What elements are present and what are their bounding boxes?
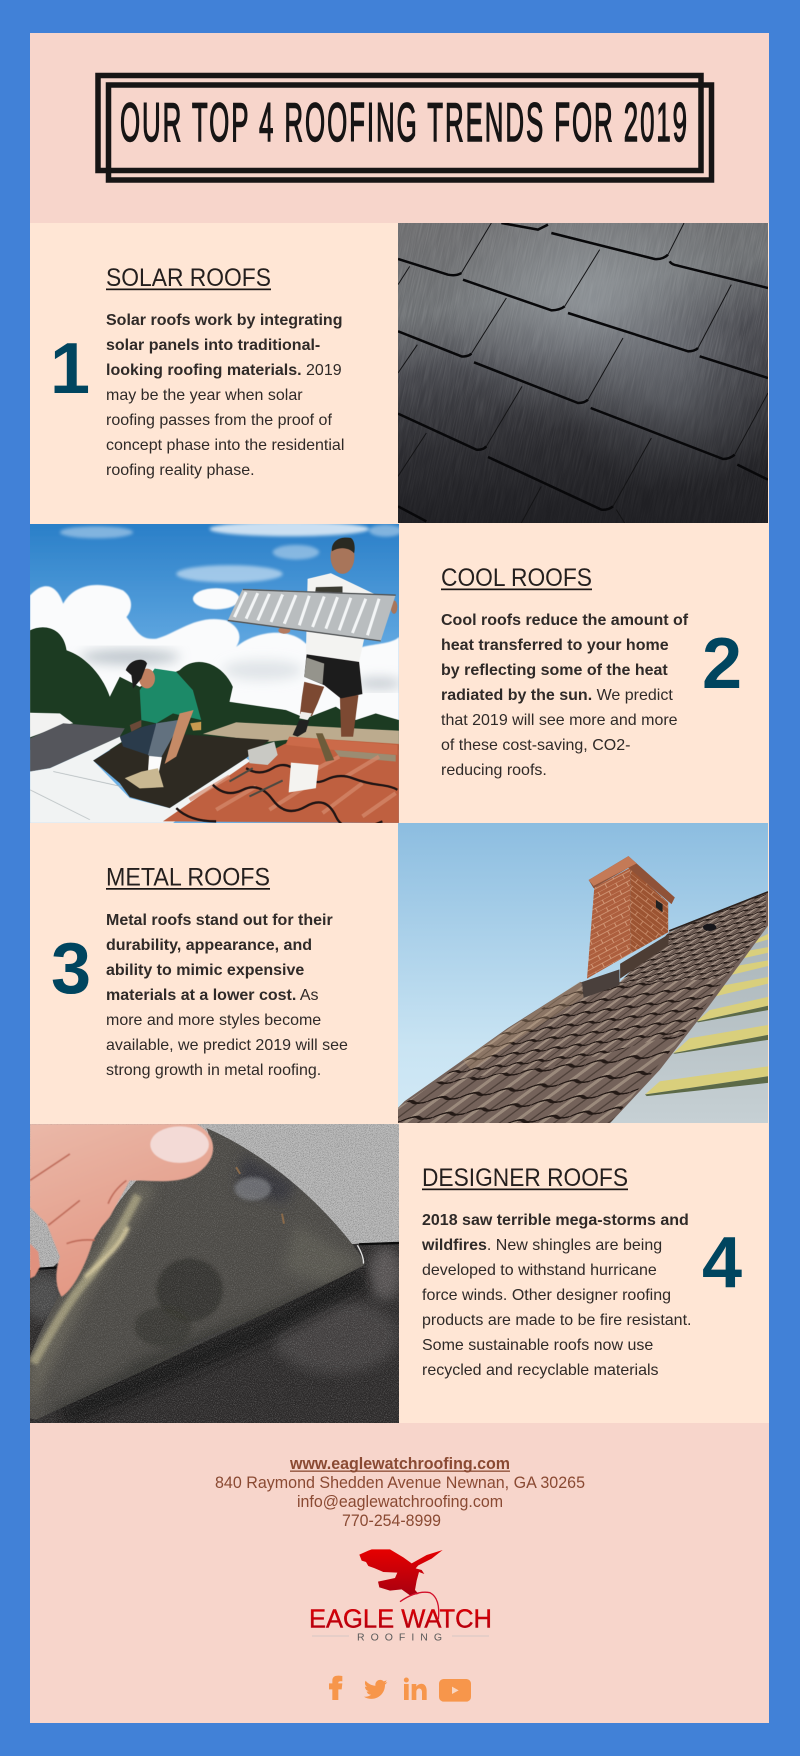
- footer contact details: info@eaglewatchroofing.com: [297, 1493, 503, 1511]
- body text: designer roofs: force winds. Other designer roofing: [422, 1287, 671, 1304]
- rolled shingle: [30, 1124, 399, 1423]
- footer contact details: [215, 1455, 585, 1530]
- logo subtitle: ROOFING: [357, 1632, 442, 1644]
- logo wordmark: EAGLE WATCH: [309, 1605, 492, 1633]
- body text: solar roofs: roofing reality phase.: [106, 462, 255, 479]
- wispy high clouds: [60, 522, 402, 582]
- social icons: [329, 1676, 471, 1702]
- icon: youtube: [439, 1679, 471, 1702]
- terracotta tile: [163, 737, 399, 829]
- icon: linkedin: [404, 1678, 427, 1700]
- body text: designer roofs: . New shingles are being: [487, 1237, 662, 1254]
- body text: cool roofs: by reflecting some of the heat: [441, 662, 668, 679]
- body text: designer roofs: Some sustainable roofs now use: [422, 1337, 653, 1354]
- body text: metal roofs: more and more styles become: [106, 1012, 321, 1029]
- number 1: 1: [50, 329, 90, 409]
- kneeling man: [120, 660, 201, 788]
- heading: metal roofs: METAL ROOFS: [106, 864, 270, 892]
- body text: metal roofs: materials at a lower cost.: [106, 987, 296, 1004]
- panel: metal roofs text: [51, 864, 348, 1079]
- body text: metal roofs: As: [296, 987, 319, 1004]
- photo: solar shingles: [398, 223, 768, 523]
- body text: metal roofs: available, we predict 2019 will see: [106, 1037, 348, 1054]
- body text: metal roofs: strong growth in metal roofing.: [106, 1062, 321, 1079]
- footer contact details: 840 Raymond Shedden Avenue Newnan, GA 30265: [215, 1474, 585, 1492]
- dark lower shingle: [30, 1244, 399, 1423]
- heading: designer roofs: DESIGNER ROOFS: [422, 1164, 628, 1192]
- underlayment and battens: [610, 922, 768, 1123]
- body text: cool roofs: radiated by the sun.: [441, 687, 592, 704]
- photo: tile roof and chimney: [398, 823, 768, 1123]
- body text: designer roofs: recycled and recyclable materials: [422, 1362, 659, 1379]
- man with metal panel: [228, 537, 397, 737]
- icon: eagle: [359, 1549, 442, 1620]
- number 3: 3: [51, 929, 91, 1009]
- chimney: [582, 856, 716, 998]
- body text: cool roofs: We predict: [592, 687, 673, 704]
- black felt underlayment: [93, 732, 269, 808]
- panel: solar roofs text: [50, 264, 344, 479]
- number 4: 4: [702, 1223, 742, 1303]
- body text: designer roofs: wildfires: [421, 1237, 487, 1254]
- body text: cool roofs: of these cost-saving, CO2-: [441, 737, 630, 754]
- body text: designer roofs: products are made to be fire resistant.: [422, 1312, 691, 1329]
- cumulus clouds: [30, 585, 399, 730]
- photo: peeled shingle: [30, 1124, 399, 1423]
- number 2: 2: [702, 624, 742, 704]
- cream section background: [30, 223, 769, 1423]
- body text: cool roofs: that 2019 will see more and more: [441, 712, 678, 729]
- white roof corner: [30, 713, 73, 737]
- paper and tools on roof: [229, 733, 334, 796]
- body text: solar roofs: may be the year when solar: [106, 387, 303, 404]
- body text: solar roofs: Solar roofs work by integrating: [106, 312, 342, 329]
- body text: solar roofs: concept phase into the residential: [106, 437, 344, 454]
- title with double frame: [98, 76, 712, 180]
- trees: [30, 627, 399, 750]
- flat tan roof: [203, 722, 399, 745]
- body text: cool roofs: Cool roofs reduce the amount of: [441, 612, 689, 629]
- panel: designer roofs text: [421, 1164, 742, 1379]
- hand and thumb: [30, 1124, 213, 1297]
- gray shingles: [30, 723, 125, 772]
- body text: solar roofs: roofing passes from the proof of: [106, 412, 332, 429]
- body text: designer roofs: 2018 saw terrible mega-storms and: [422, 1212, 689, 1229]
- body text: designer roofs: developed to withstand hurricane: [422, 1262, 657, 1279]
- body text: metal roofs: durability, appearance, and: [106, 937, 312, 954]
- heading: solar roofs: SOLAR ROOFS: [106, 264, 271, 292]
- white membrane: [30, 737, 251, 823]
- heading: cool roofs: COOL ROOFS: [441, 564, 592, 592]
- body text: solar roofs: solar panels into traditional-: [106, 337, 320, 354]
- tile roof: [398, 891, 768, 1123]
- icon: twitter: [364, 1680, 387, 1699]
- photo: workers on roof: [30, 524, 399, 823]
- body text: metal roofs: ability to mimic expensive: [106, 962, 304, 979]
- panel: cool roofs text: [441, 564, 742, 779]
- icon: facebook: [329, 1676, 342, 1700]
- body text: cool roofs: heat transferred to your home: [441, 637, 669, 654]
- body text: solar roofs: looking roofing materials.: [106, 362, 302, 379]
- footer contact details: 770-254-8999: [342, 1512, 441, 1530]
- footer contact details: www.eaglewatchroofing.com: [289, 1455, 510, 1473]
- body text: solar roofs: 2019: [302, 362, 342, 379]
- logo: Eagle Watch Roofing: [309, 1549, 492, 1644]
- body text: metal roofs: Metal roofs stand out for their: [106, 912, 333, 929]
- body text: cool roofs: reducing roofs.: [441, 762, 547, 779]
